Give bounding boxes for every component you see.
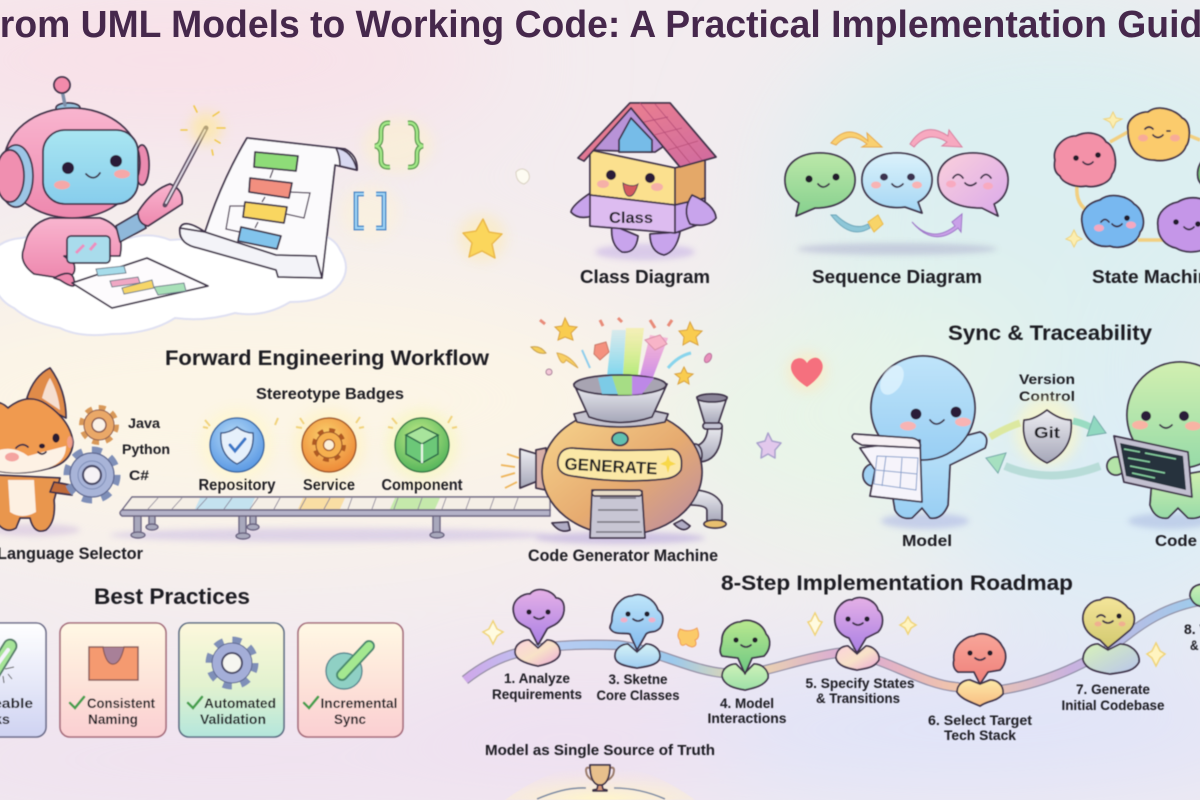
panel: state machine [1055, 108, 1200, 287]
heading: stereotype badges: Stereotype Badges [256, 386, 404, 403]
panel: roadmap [465, 584, 1200, 743]
icon: orange gear [82, 408, 116, 442]
arrows [986, 416, 1106, 476]
step labels: & Transitions [816, 691, 900, 706]
card: incremental sync: Sync [334, 712, 366, 727]
version control: Control [1019, 388, 1075, 404]
icon: blue gear [68, 451, 116, 499]
step labels: 1. Analyze [504, 671, 570, 686]
funnel [574, 375, 667, 422]
panel: code generator machine [501, 318, 727, 565]
step 6 mascot [954, 634, 1006, 706]
arrows [831, 130, 962, 237]
heading: best practices: Best Practices [94, 584, 250, 609]
step 8 mascot [1190, 584, 1200, 606]
nameplate: GENERATE [564, 455, 658, 478]
machine shadow [535, 532, 705, 544]
label: Class Diagram [580, 267, 710, 287]
step 1 mascot [513, 590, 564, 666]
panel: class diagram [571, 103, 716, 287]
step labels: 7. Generate [1076, 682, 1150, 697]
model character [852, 356, 987, 529]
panel: sequence diagram [785, 130, 1008, 287]
step labels: Initial Codebase [1062, 698, 1165, 713]
glow [505, 765, 695, 800]
label: Code Generator Machine [528, 547, 718, 565]
step 5 mascot [835, 598, 882, 670]
panel: language selector [0, 368, 170, 563]
card: traceable links [0, 623, 46, 737]
card: automated validation: Validation [200, 712, 266, 727]
icon: cloud with robot and scroll [0, 77, 357, 335]
card: consistent naming: Naming [88, 712, 138, 727]
step labels: Tech Stack [944, 728, 1016, 743]
blue state [1082, 196, 1143, 247]
panel: sync diagram [757, 352, 1200, 550]
rainbow stream [606, 328, 668, 392]
machine body [542, 409, 702, 535]
sparkle on pointer [181, 106, 225, 155]
icon: fox [0, 368, 80, 536]
language names: Python [122, 442, 170, 457]
step labels: Requirements [492, 687, 582, 702]
ramp [590, 490, 645, 538]
label: Sequence Diagram [812, 267, 982, 287]
labels: Model [902, 533, 952, 550]
step 3 mascot [610, 595, 663, 668]
yellow state [1128, 108, 1189, 160]
icon: tiny cloud puff [516, 169, 529, 184]
green state [1198, 158, 1200, 188]
cloud [0, 232, 346, 335]
house mascot: Class [609, 210, 653, 227]
badge: component: Component [382, 477, 462, 494]
card: consistent naming: Consistent [87, 696, 155, 711]
feet [552, 520, 690, 531]
step labels: Core Classes [596, 688, 680, 703]
step labels: 4. Model [720, 696, 774, 711]
confetti [531, 318, 713, 384]
connector ring [1077, 128, 1200, 240]
code character [1107, 362, 1200, 529]
icon: git shield [1015, 398, 1079, 466]
sparkles [1066, 112, 1122, 247]
chat bubbles [785, 153, 1008, 216]
right pipes [660, 394, 727, 528]
step labels: 3. Sketne [608, 672, 668, 687]
scroll with UML blocks [180, 138, 357, 278]
badge: service [293, 409, 365, 494]
heading: Model as Single Source of Truth [485, 742, 715, 759]
panel: sync diagram: Code [1155, 533, 1197, 550]
step labels: 6. Select Target [928, 713, 1033, 728]
card: consistent naming [60, 623, 166, 737]
icon: floating star [458, 214, 506, 262]
panel: best practices cards [0, 623, 403, 737]
label: Language Selector [0, 544, 143, 563]
pink state [1055, 133, 1115, 186]
nameplate [558, 448, 682, 481]
heading: forward engineering workflow: Forward Engineering Workflow [165, 346, 489, 370]
language names: Java [128, 416, 161, 431]
purple state [1158, 198, 1200, 252]
badge: repository [198, 409, 278, 494]
icon: lilac star [757, 433, 781, 458]
card: incremental sync: Incremental [320, 696, 398, 711]
step 4 mascot [720, 620, 770, 690]
indicator light [612, 432, 628, 446]
icon: heart [787, 352, 827, 392]
badge: component [382, 409, 462, 494]
version control [1019, 371, 1075, 404]
left nozzle [501, 448, 546, 490]
version control: Version [1019, 371, 1075, 387]
language names: C# [129, 468, 150, 483]
heading: sync and traceability: Sync & Traceability [948, 322, 1152, 345]
icon: git shield: Git [1034, 425, 1061, 442]
shadow [797, 243, 997, 255]
panel: single source of truth [485, 742, 715, 800]
conveyor belt [110, 497, 550, 542]
card: automated validation [179, 623, 284, 737]
step labels: Interactions [708, 711, 786, 726]
small paper diagram [72, 258, 208, 308]
step labels [492, 622, 1200, 743]
card: incremental sync [298, 623, 403, 737]
house mascot [571, 103, 716, 260]
heading: roadmap: 8-Step Implementation Roadmap [721, 571, 1073, 595]
collar [574, 408, 668, 427]
icon: trophy [586, 765, 614, 791]
step 7 mascot [1083, 598, 1139, 674]
card: automated validation: Automated [204, 696, 276, 711]
badge: service: Service [303, 477, 355, 494]
dome [537, 788, 665, 799]
robot [0, 77, 206, 286]
icon: curly braces [363, 117, 433, 173]
icon: square brackets [340, 184, 400, 240]
panel: stereotype badges [198, 409, 462, 494]
language names [122, 416, 170, 483]
path [465, 600, 1200, 691]
badge: repository: Repository [198, 477, 276, 494]
step labels: 5. Specify States [806, 676, 914, 691]
sparkles [483, 613, 1165, 666]
